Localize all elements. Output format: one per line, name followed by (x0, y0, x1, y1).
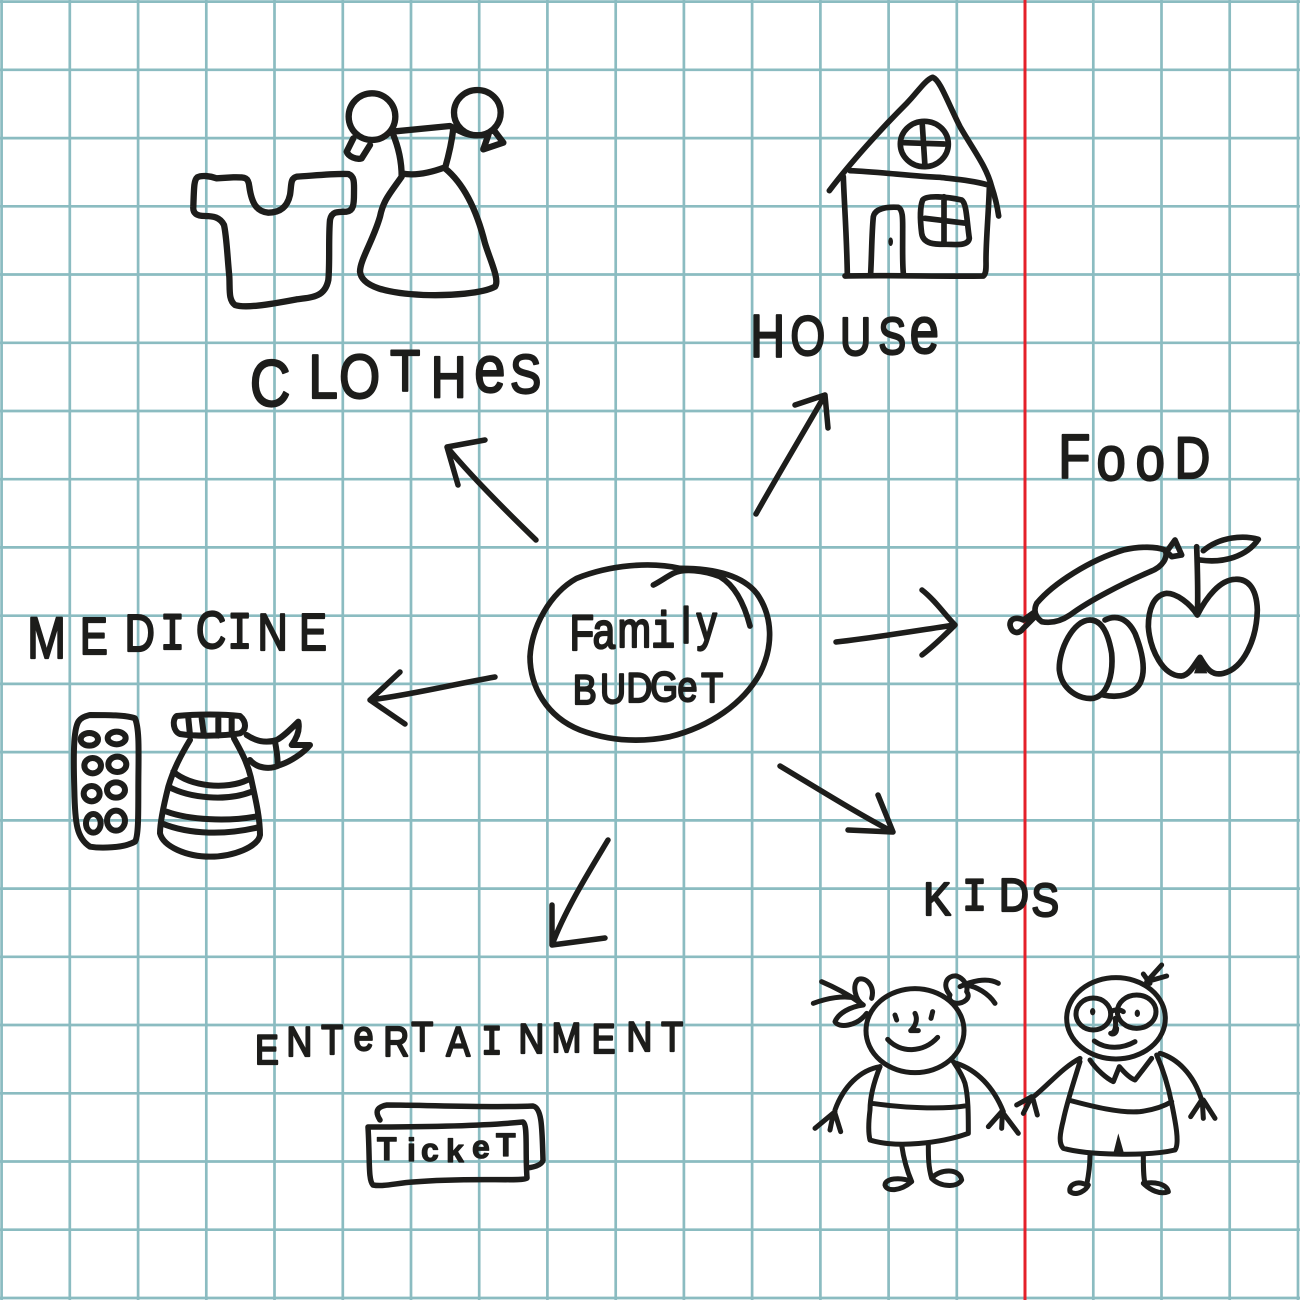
icon: boy (1017, 965, 1215, 1193)
heading: clothes: T (390, 339, 420, 404)
heading: entertainment: E (592, 1016, 615, 1063)
heading: family budget: y (697, 595, 717, 651)
heading: house: e (910, 293, 939, 367)
heading: entertainment: E (255, 1027, 279, 1074)
icon: sausage (1010, 540, 1182, 632)
arrow: to house (756, 395, 828, 514)
icon: dress (347, 90, 503, 295)
icon: house (829, 77, 999, 276)
icon: t-shirt and dress (193, 90, 503, 306)
arrow: to food (836, 590, 955, 655)
heading: clothes: O (339, 343, 380, 412)
heading: kids: K (923, 874, 951, 926)
heading: clothes: C (250, 347, 290, 420)
panel: entertainment (255, 1013, 683, 1186)
icon: tickets: e (472, 1129, 490, 1165)
icon: food (1010, 537, 1258, 699)
heading: clothes: S (510, 343, 541, 405)
icon: eggs (1059, 618, 1143, 699)
heading: entertainment: R (383, 1019, 409, 1066)
heading: medicine: D (125, 604, 155, 662)
icon: t-shirt (193, 174, 354, 306)
heading: house: U (840, 308, 871, 367)
heading: entertainment: A (446, 1019, 470, 1066)
icon: tickets: T (496, 1127, 516, 1163)
heading: house: S (878, 307, 906, 365)
heading: entertainment: N (286, 1019, 312, 1066)
heading: family budget: m (618, 602, 651, 658)
panel: medicine (27, 601, 327, 857)
heading: food: o (1097, 425, 1126, 494)
heading: medicine: N (258, 603, 288, 661)
heading: medicine: C (196, 601, 226, 659)
heading: food: F (1058, 423, 1090, 492)
heading: house: O (790, 304, 825, 367)
panel: food (1010, 423, 1258, 699)
icon: spray bottle (174, 714, 245, 736)
arrow: to entertainment (552, 840, 608, 945)
heading: medicine: E (299, 603, 327, 661)
heading: entertainment: M (552, 1015, 581, 1062)
hand-drawn circle (530, 565, 770, 740)
panel: house (750, 77, 999, 370)
icon: pill pack (74, 715, 139, 848)
heading: clothes: H (431, 345, 467, 410)
arrow: to medicine (370, 672, 495, 724)
panel: kids (813, 870, 1215, 1193)
heading: medicine: E (80, 607, 108, 665)
icon: tickets: i (407, 1132, 416, 1168)
heading: medicine: M (27, 606, 66, 671)
heading: kids: D (999, 870, 1029, 922)
heading: family budget: a (593, 603, 616, 659)
heading: kids: S (1031, 875, 1059, 927)
icon: kids (813, 965, 1215, 1193)
heading: entertainment: T (661, 1014, 683, 1061)
heading: clothes: L (309, 343, 338, 412)
heading: entertainment: N (519, 1016, 544, 1063)
central node: family budget: G (650, 664, 678, 711)
heading: medicine: I (160, 607, 185, 666)
heading: food: o (1136, 425, 1165, 494)
icon: tickets (368, 1105, 543, 1186)
icon: girl (813, 976, 1018, 1190)
panel: clothes (193, 90, 541, 420)
central node: family budget (530, 565, 770, 740)
heading: entertainment: T (321, 1017, 343, 1064)
icon: tickets: c (421, 1132, 439, 1168)
icon: tickets: k (446, 1133, 464, 1169)
central node: family budget: T (701, 665, 723, 712)
central node: family budget: B (573, 667, 597, 714)
heading: clothes: e (474, 333, 506, 406)
central node: family budget: e (677, 664, 697, 711)
heading: entertainment: I (481, 1020, 503, 1067)
icon: apple (1148, 537, 1258, 676)
heading: entertainment: T (411, 1014, 433, 1061)
heading: family budget: F (570, 605, 594, 661)
heading: entertainment: N (626, 1014, 652, 1061)
central node: family budget: D (626, 665, 652, 712)
heading: entertainment: e (354, 1013, 373, 1060)
heading: family budget: i (651, 605, 675, 662)
icon: tickets: T (377, 1131, 397, 1167)
central node: family budget: U (600, 666, 626, 713)
heading: food: D (1175, 426, 1210, 491)
heading: kids: I (962, 873, 987, 925)
arrow: to kids (780, 766, 893, 832)
heading: medicine: I (227, 606, 252, 665)
arrow: to clothes (447, 440, 536, 540)
icon: medicine (74, 714, 310, 857)
heading: house: H (750, 303, 785, 370)
heading: family budget: l (682, 598, 690, 654)
